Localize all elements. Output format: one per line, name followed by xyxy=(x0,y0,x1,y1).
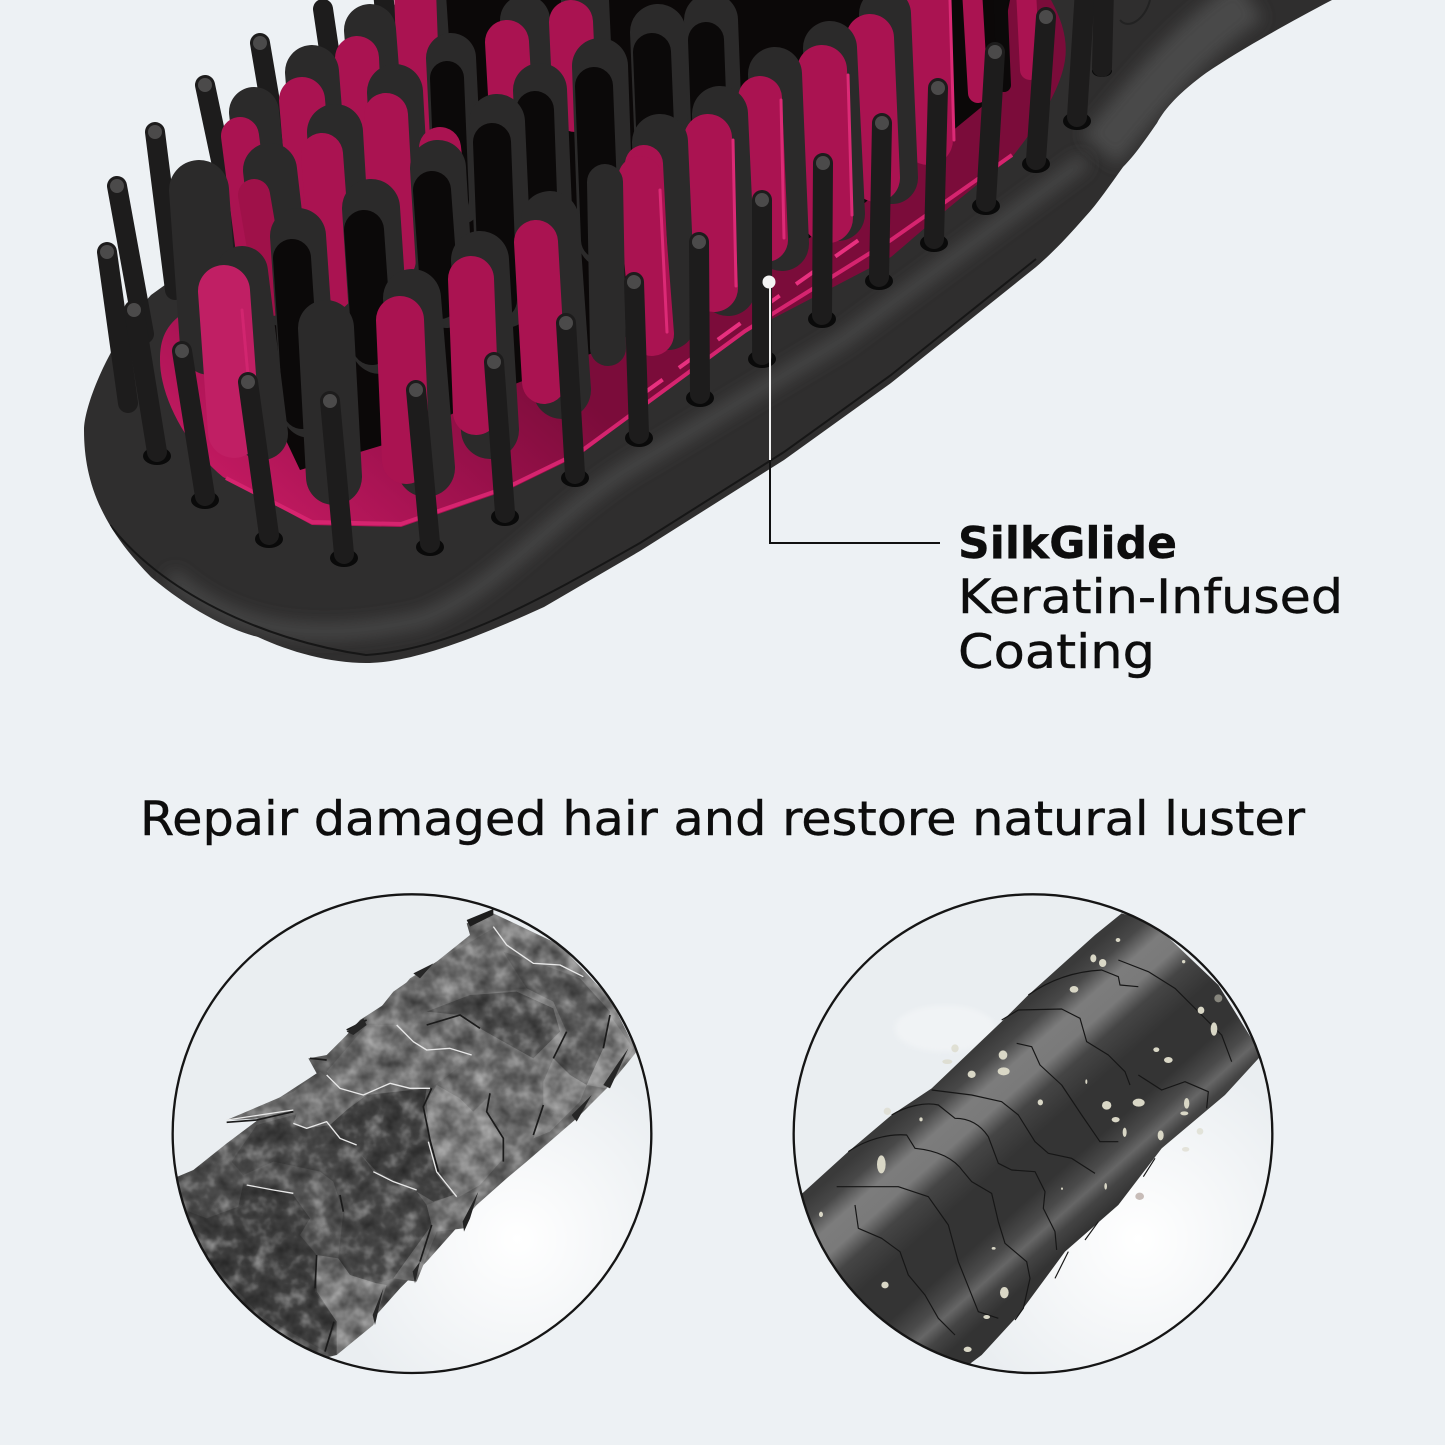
scale lines xyxy=(837,960,1232,1335)
lifted scale tips xyxy=(467,909,493,927)
bristle paddles, back rows xyxy=(199,0,1030,477)
hair shaft with scales xyxy=(173,913,637,1358)
product: hair straightening brush xyxy=(70,0,1350,680)
callout label: SilkGlide Keratin-Infused Coating xyxy=(958,518,1343,680)
callout label: SilkGlide Keratin-Infused Coating: SilkGlide xyxy=(958,518,1177,569)
debris specks xyxy=(819,938,1222,1352)
callout label: SilkGlide Keratin-Infused Coating: Coating xyxy=(958,625,1155,680)
back bristles xyxy=(100,0,388,403)
brush body xyxy=(70,0,1350,680)
callout leader line with marker dot xyxy=(762,276,940,543)
pink keratin plate xyxy=(160,0,1066,527)
front bristles xyxy=(127,0,1112,567)
panel: repaired hair magnified xyxy=(794,894,1272,1373)
circle outline xyxy=(173,894,651,1373)
smooth hair shaft xyxy=(795,913,1262,1365)
scale edges: shadows xyxy=(227,1112,293,1122)
panel: damaged hair magnified xyxy=(173,894,651,1373)
scale edges: highlights xyxy=(327,1075,430,1095)
circle outline xyxy=(794,894,1272,1373)
heading: Repair damaged hair and restore natural luster xyxy=(140,792,1306,847)
callout label: SilkGlide Keratin-Infused Coating: Keratin-Infused xyxy=(958,570,1343,625)
